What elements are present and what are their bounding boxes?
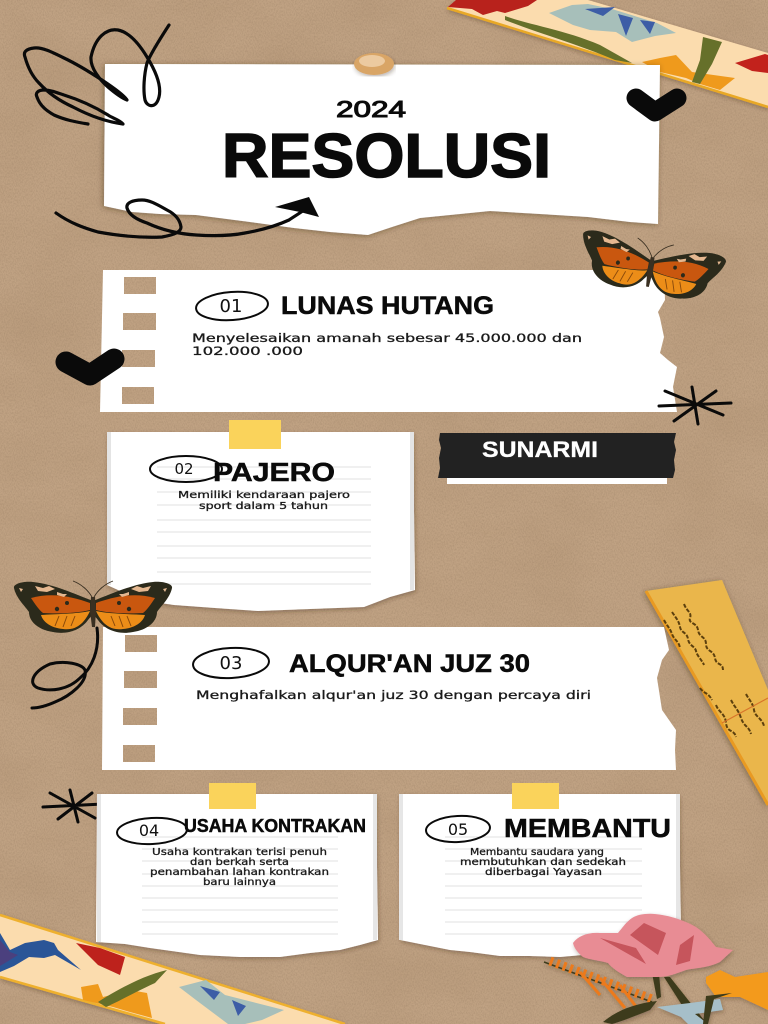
body 05 (460, 847, 626, 878)
body 02 (178, 490, 350, 512)
washi tape: right handwritten note (646, 580, 768, 805)
panel: title card (104, 64, 660, 235)
body 02: sport dalam 5 tahun (199, 501, 328, 512)
body 04: Usaha kontrakan terisi penuh (152, 847, 327, 858)
name banner: SUNARMI (438, 433, 676, 484)
panel: 04 note (96, 783, 378, 957)
scribble: butterfly tail (32, 628, 98, 708)
body 05: diberbagai Yayasan (485, 867, 602, 878)
number oval 01 (195, 290, 269, 322)
body 03: Menghafalkan alqur'an juz 30 dengan percaya diri (196, 688, 591, 702)
body 02: Memiliki kendaraan pajero (178, 490, 350, 501)
body 04: penambahan lahan kontrakan (150, 867, 329, 878)
number oval 03 (192, 646, 270, 680)
pink flower (573, 914, 733, 977)
number oval 05: 05 (448, 820, 468, 839)
panel: 01 card (100, 270, 677, 412)
body 01: Menyelesaikan amanah sebesar 45.000.000 dan (192, 331, 582, 345)
heading 02: PAJERO (213, 457, 335, 487)
body 04: dan berkah serta (190, 857, 289, 868)
number oval 02: 02 (174, 460, 194, 478)
body 04 (150, 847, 329, 888)
body 05: membutuhkan dan sedekah (460, 857, 626, 868)
name banner: SUNARMI: SUNARMI (482, 437, 598, 462)
icon: heart left (66, 359, 114, 375)
panel: 03 card (102, 627, 676, 770)
number oval 04: 04 (139, 821, 159, 840)
butterfly left (14, 581, 172, 633)
number oval 05 (425, 814, 491, 844)
panel: 05 note (399, 783, 681, 957)
number oval 03: 03 (220, 653, 242, 674)
body 01 (192, 331, 582, 358)
orange sprig (544, 961, 652, 1012)
tape 02 (229, 420, 281, 449)
stems and leaves (603, 973, 704, 1024)
number oval 02 (150, 456, 222, 482)
panel: 02 note (107, 420, 415, 611)
tape 04 (209, 783, 256, 809)
icon: heart top right (636, 98, 677, 112)
scribble: top left loops (24, 25, 169, 124)
icon: star left (43, 790, 103, 822)
title: RESOLUSI: RESOLUSI (222, 122, 551, 191)
number oval 04 (116, 816, 188, 846)
number oval 01: 01 (220, 296, 242, 317)
year label: 2024 (336, 96, 406, 122)
body 05: Membantu saudara yang (470, 847, 604, 858)
butterfly top right (574, 228, 727, 306)
heading 01: LUNAS HUTANG (281, 292, 494, 320)
pin on title card (354, 53, 394, 75)
blue tape (657, 999, 723, 1024)
body 01: 102.000 .000 (192, 344, 303, 358)
washi tape: bottom left floral (0, 915, 345, 1024)
icon: star right (659, 387, 731, 424)
tape 05 (512, 783, 559, 809)
scribble: arrow under title (56, 197, 319, 237)
heading 03: ALQUR'AN JUZ 30 (289, 650, 530, 678)
heading 05: MEMBANTU (504, 813, 671, 843)
body 04: baru lainnya (203, 877, 276, 888)
orange flower (706, 970, 768, 1010)
washi tape: top right floral (447, 0, 768, 107)
flower: bottom right bouquet (544, 914, 768, 1024)
heading 04: USAHA KONTRAKAN (184, 816, 366, 836)
